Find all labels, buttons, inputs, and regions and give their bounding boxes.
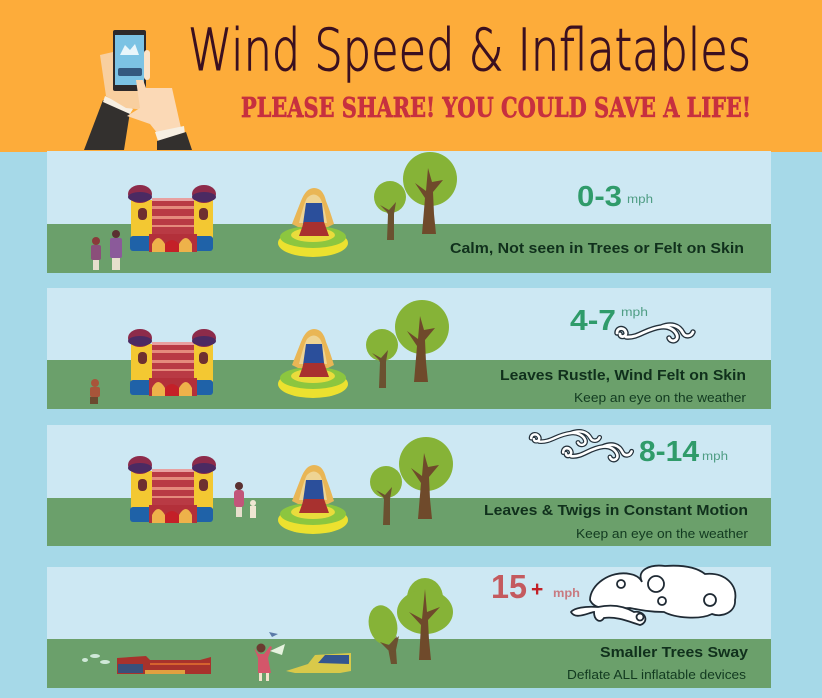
icon: parent and child with dog [234, 482, 256, 518]
icon: inflatable water slide [278, 465, 348, 534]
icon: trees [374, 152, 457, 240]
icon: person in strong wind [254, 632, 285, 681]
icon: deflated water slide [286, 653, 351, 673]
icon: wind swirl [617, 325, 693, 341]
wind speed 0-3 mph: mph [627, 194, 653, 206]
icon: trees [366, 300, 449, 388]
wind speed 15+ mph: + [531, 578, 543, 601]
panel: 15+ mph [47, 566, 771, 688]
wind speed 0-3 mph: 0-3 [577, 181, 622, 213]
advice: Deflate ALL inflatable devices [567, 667, 747, 682]
header band [0, 0, 822, 152]
panel: 4-7 mph [47, 288, 771, 409]
panel: 0-3 mph [47, 151, 771, 273]
wind speed 15+ mph [491, 568, 580, 605]
caption: Smaller Trees Sway [600, 644, 749, 661]
icon: two people walking [91, 230, 122, 270]
icon: bouncy castle [128, 185, 216, 252]
icon: inflatable water slide [278, 329, 348, 398]
wind speed 15+ mph: 15 [491, 568, 527, 605]
wind speed 4-7 mph: 4-7 [570, 305, 616, 337]
caption: Leaves & Twigs in Constant Motion [484, 502, 748, 519]
advice: Keep an eye on the weather [574, 390, 747, 405]
icon: trees [370, 437, 453, 525]
wind speed 15+ mph: mph [553, 586, 580, 600]
caption: Leaves Rustle, Wind Felt on Skin [500, 367, 746, 384]
icon: child [90, 379, 100, 404]
caption: Calm, Not seen in Trees or Felt on Skin [450, 241, 744, 257]
icon: inflatable water slide [278, 188, 348, 257]
advice: Keep an eye on the weather [576, 526, 749, 541]
wind speed 4-7 mph: mph [621, 307, 648, 319]
wind speed 8-14 mph [639, 436, 728, 468]
icon: storm cloud [571, 566, 735, 625]
icon: bouncy castle [128, 329, 216, 396]
wind speed 8-14 mph: 8-14 [639, 436, 699, 468]
icon: bouncy castle [128, 456, 216, 523]
wind speed 8-14 mph: mph [702, 451, 728, 463]
wind speed 4-7 mph [570, 305, 648, 337]
panel: 8-14 mph [47, 425, 771, 546]
icon: deflated bouncy castle [82, 654, 211, 674]
icon: hands holding phone with share button [84, 30, 192, 150]
icon: swaying trees [365, 578, 453, 664]
icon: wind swirl [531, 431, 632, 460]
wind speed 0-3 mph [577, 181, 653, 213]
